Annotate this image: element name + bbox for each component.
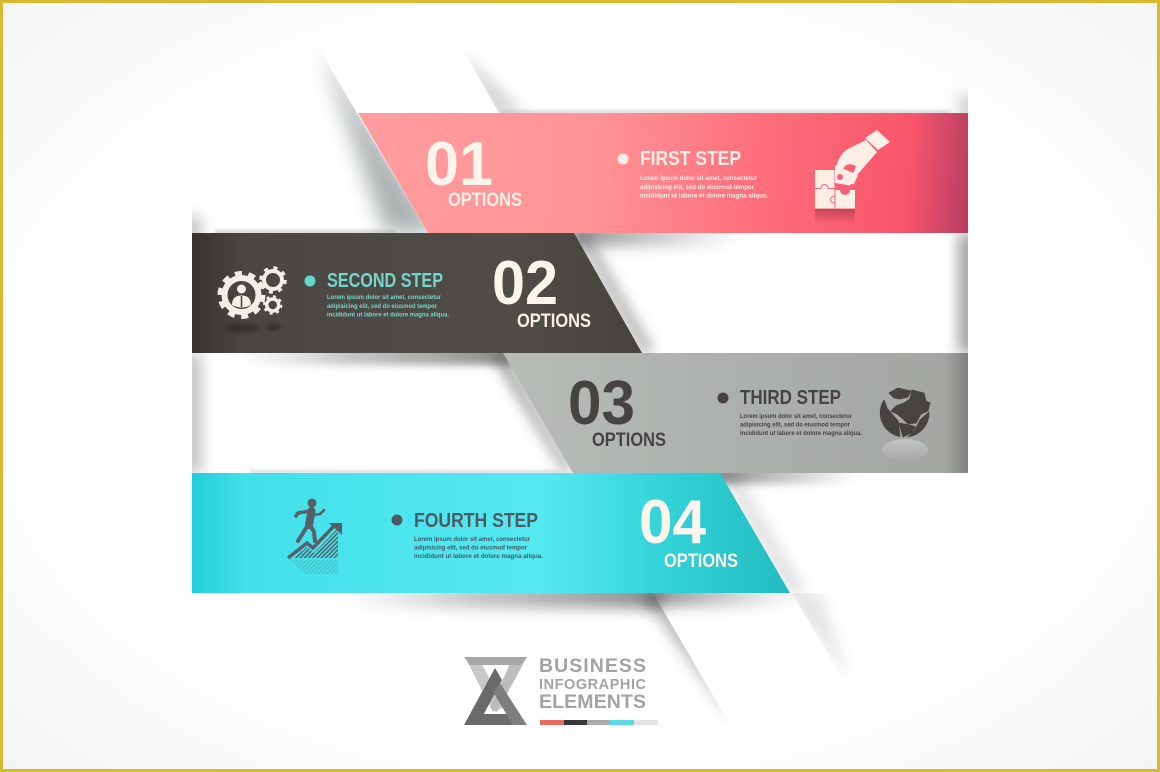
panel: ribbon 3 <box>503 353 968 473</box>
shadow: left above ribbon 2 <box>192 210 208 233</box>
cuff <box>865 130 890 150</box>
step description: adipisicing elit, sed do eiusmod tempor <box>640 184 754 191</box>
shadow: under ribbon 3 <box>715 464 860 484</box>
hand <box>836 140 877 175</box>
ribbon shape <box>358 113 968 233</box>
step description: Lorem ipsum dolor sit amet, consectetur <box>327 294 441 301</box>
globe reflection <box>882 439 928 461</box>
shadow: left of ribbon 3 <box>492 353 573 473</box>
step description: adipisicing elit, sed do eiusmod tempor <box>327 303 437 310</box>
step heading: FOURTH STEP <box>414 510 538 532</box>
icon: globe <box>880 388 930 461</box>
arrow reflection <box>290 560 338 574</box>
shadow: under ribbon 2 <box>235 343 515 365</box>
number 02: 02 <box>492 249 558 318</box>
logo <box>464 655 658 725</box>
bullet <box>304 276 316 286</box>
logo text: infographic: INFOGRAPHIC <box>539 677 647 693</box>
tie <box>240 296 242 307</box>
step description: Lorem ipsum dolor sit amet, consectetur <box>740 413 852 420</box>
step description: Lorem ipsum dolor sit amet, consectetur <box>640 175 757 182</box>
arrow line <box>288 526 334 558</box>
step description: adipisicing elit, sed do eiusmod tempor <box>740 422 850 428</box>
options label: OPTIONS <box>448 190 522 211</box>
shadow: under ribbon 4 <box>340 584 800 608</box>
step description: incididunt ut labore et dolore magna aliqua. <box>740 430 862 437</box>
puzzle seams <box>815 184 835 208</box>
shadow: lower band left edge <box>643 593 724 716</box>
shadow: left gap between ribbons 2 and 4 <box>192 353 209 473</box>
panel: ribbon 1 <box>358 113 968 233</box>
icon: gears with person <box>220 268 285 333</box>
shadow: right gap between ribbons 1 and 3 <box>949 233 968 353</box>
step description <box>414 536 543 560</box>
step heading: THIRD STEP <box>740 387 841 409</box>
step description <box>327 294 449 318</box>
runner head <box>308 498 316 508</box>
panel: ribbon 2 <box>192 233 642 353</box>
ribbon shape <box>192 233 642 353</box>
puzzle top right piece <box>835 165 858 186</box>
logo text: elements: ELEMENTS <box>539 691 646 713</box>
person <box>237 284 246 294</box>
shadow: lower band right edge <box>792 593 844 664</box>
panel: ribbon 4 <box>192 473 790 593</box>
bullet <box>392 514 402 526</box>
gear reflection <box>224 323 281 333</box>
large gear <box>224 278 258 312</box>
ribbon shape <box>192 473 790 593</box>
top edge shadow: ribbon 2 <box>215 230 395 233</box>
shadow: under ribbon 1 <box>570 224 745 246</box>
icon: hand with puzzle <box>815 130 890 224</box>
logo mark <box>464 657 527 725</box>
step heading: SECOND STEP <box>327 270 443 292</box>
step description: incididunt ut labore et dolore magna aliqua. <box>414 553 543 560</box>
small gear <box>267 299 279 311</box>
top edge shadow: ribbon 4 <box>250 470 560 473</box>
step description: adipisicing elit, sed do eiusmod tempor <box>414 544 527 552</box>
step heading: FIRST STEP <box>640 148 741 170</box>
logo text: business: BUSINESS <box>539 655 646 677</box>
step description <box>740 413 862 437</box>
medium gear <box>264 271 282 289</box>
number 03: 03 <box>568 369 635 438</box>
bullet <box>718 392 728 404</box>
puzzle notches <box>837 174 843 180</box>
step description: incididunt ut labore et dolore magna aliqua. <box>327 312 449 318</box>
options label: OPTIONS <box>517 311 591 332</box>
arrow head <box>329 523 342 535</box>
fold shadows <box>180 50 980 725</box>
ribbon shape <box>503 353 968 473</box>
colour legend bar <box>540 720 658 725</box>
shadow: right above ribbon 1 <box>952 90 968 113</box>
step description <box>640 175 768 200</box>
puzzle lower right block <box>836 190 855 208</box>
top edge shadow: ribbon 1 <box>500 110 950 114</box>
options label: OPTIONS <box>592 430 666 451</box>
icon: runner on rising arrow <box>288 498 342 574</box>
number 04: 04 <box>639 488 706 557</box>
puzzle reflection <box>815 209 855 224</box>
runner limbs <box>296 510 324 541</box>
globe continents <box>880 388 930 437</box>
shadow: right of ribbon 4 <box>720 473 806 593</box>
options label: OPTIONS <box>664 551 738 572</box>
step description: incididunt ut labore et dolore magna aliqua. <box>640 192 768 200</box>
hatched area <box>294 528 338 558</box>
number 01: 01 <box>425 130 493 199</box>
puzzle left block <box>815 170 834 208</box>
shadow: upper band left edge <box>320 60 428 233</box>
bullet <box>618 154 628 164</box>
shadow: right of ribbon 2 <box>574 233 655 353</box>
step description: Lorem ipsum dolor sit amet, consectetur <box>414 536 530 543</box>
shadow: upper band right edge <box>469 58 523 113</box>
